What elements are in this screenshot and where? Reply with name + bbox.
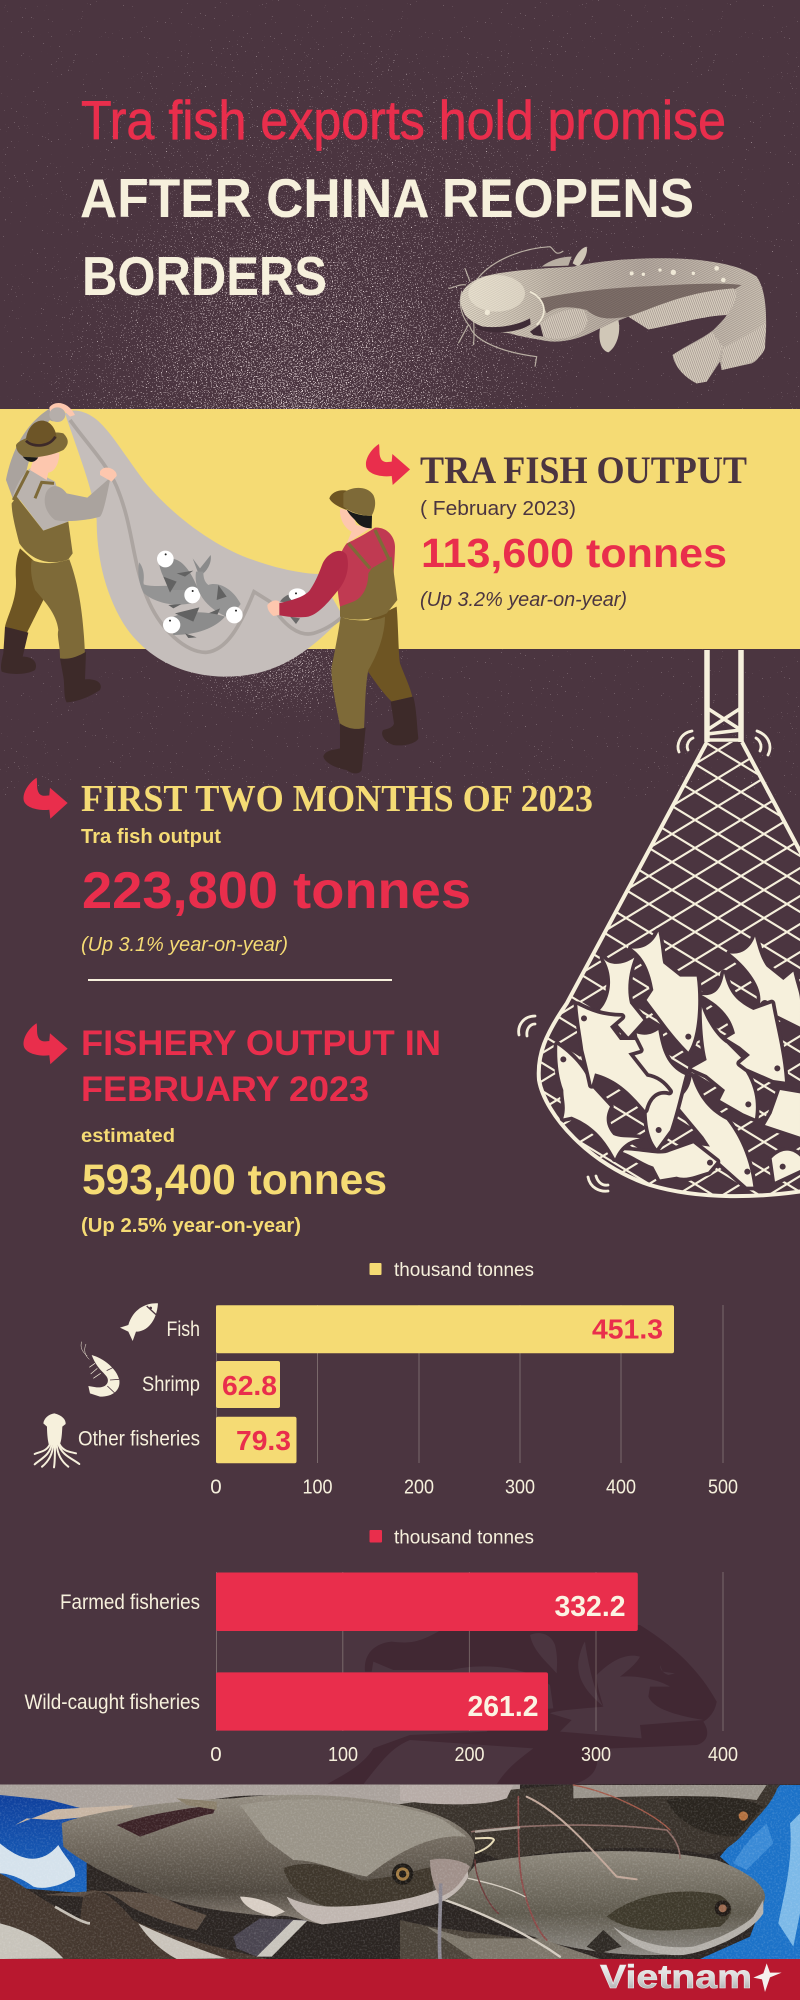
- footer bar: [0, 1959, 800, 2000]
- icon: shrimp: [81, 1342, 119, 1397]
- legend: thousand tonnes: [394, 1260, 534, 1281]
- icon: engraved catfish: [448, 247, 766, 383]
- bar chart: farmed vs wild-caught: [24, 1527, 738, 1766]
- legend: thousand tonnes: [394, 1527, 534, 1548]
- logo: Vietnam+: Vietnam: [600, 1958, 752, 1995]
- sleeve and hand: [45, 478, 110, 521]
- fish in the net: [138, 551, 306, 638]
- gridlines: [216, 1305, 723, 1463]
- barbels: [445, 1785, 680, 1957]
- neck and head: [30, 453, 59, 480]
- watermark catfish: [327, 1625, 717, 1784]
- title: [80, 89, 726, 307]
- title line: BORDERS: BORDERS: [82, 245, 327, 307]
- hat: [16, 432, 68, 457]
- right fisherman: [267, 488, 418, 773]
- icon: fish: [120, 1303, 158, 1341]
- axis labels: 0: [210, 1743, 222, 1766]
- barbel: [439, 1883, 441, 1959]
- photo grain: [0, 1784, 800, 1960]
- icon: red arrow: [24, 1023, 68, 1064]
- change: (Up 2.5% year-on-year): [81, 1214, 301, 1237]
- front leg and boot: [31, 559, 85, 659]
- torso: [13, 468, 68, 531]
- value: 113,600 tonnes: [421, 530, 727, 576]
- axis labels: 0: [210, 1476, 222, 1498]
- overalls: [340, 557, 397, 620]
- lower left fish: [0, 1873, 267, 1959]
- arm and hand: [278, 551, 348, 617]
- value: 593,400 tonnes: [82, 1157, 387, 1204]
- gridlines: [216, 1572, 723, 1731]
- bar: fish: Fish: [166, 1318, 200, 1341]
- front leg and boot: [331, 617, 385, 730]
- title line: AFTER CHINA REOPENS: AFTER CHINA REOPENS: [80, 167, 694, 229]
- bar: wild-caught fisheries: [24, 1672, 548, 1731]
- change: (Up 3.1% year-on-year): [81, 934, 288, 956]
- value: 223,800 tonnes: [82, 862, 471, 920]
- heading: FIRST TWO MONTHS OF 2023: [81, 778, 593, 820]
- axis labels: 500: [708, 1476, 738, 1498]
- bar: wild-caught fisheries: 261.2: [468, 1691, 538, 1723]
- subheading: estimated: [81, 1125, 175, 1147]
- panel: tra fish output: [366, 444, 747, 611]
- axis labels: [210, 1743, 738, 1766]
- net handle: [707, 650, 741, 742]
- bar chart: catch by species: [78, 1260, 738, 1498]
- heading line two: FEBRUARY 2023: [81, 1070, 369, 1109]
- upper right dark fish: [380, 1785, 778, 1860]
- bar: other fisheries: Other fisheries: [78, 1428, 200, 1450]
- icon: red arrow: [366, 444, 410, 485]
- icon: fishing net with fish: [519, 650, 800, 1200]
- axis labels: 100: [302, 1476, 332, 1498]
- speckle texture: [10, 10, 670, 730]
- back leg and boot: [365, 607, 412, 702]
- axis labels: 400: [606, 1476, 636, 1498]
- axis labels: 300: [505, 1476, 535, 1498]
- bar: farmed fisheries: [60, 1572, 638, 1631]
- left fisherman: [6, 403, 117, 702]
- bar: shrimp: [142, 1361, 280, 1408]
- panel: fishery output: [24, 1023, 441, 1237]
- bar: shrimp: 62.8: [222, 1370, 277, 1401]
- panel: first two months: [24, 778, 593, 956]
- date: ( February 2023): [420, 498, 576, 520]
- eye: [392, 1863, 413, 1885]
- pectoral fin: [233, 1918, 307, 1957]
- bar: fish: [166, 1305, 674, 1353]
- yellow band panel: [0, 409, 800, 649]
- icon: squid: [35, 1413, 79, 1467]
- axis labels: 100: [328, 1743, 358, 1766]
- left fisherman back leg and boot: [1, 548, 43, 674]
- net mesh: [530, 740, 800, 1200]
- axis labels: 300: [581, 1743, 611, 1766]
- heading line one: FISHERY OUTPUT IN: [81, 1024, 441, 1063]
- dorsal fin: [117, 1805, 217, 1837]
- top fish strip: [0, 1784, 520, 1808]
- axis labels: 400: [708, 1743, 738, 1766]
- bar: shrimp: Shrimp: [142, 1373, 200, 1396]
- right blue tarp: [700, 1785, 800, 1959]
- net: [65, 411, 343, 677]
- heading: TRA FISH OUTPUT: [420, 449, 747, 492]
- raised sleeve and hand: [6, 408, 63, 500]
- cap: [329, 490, 347, 510]
- net outline: [539, 742, 800, 1196]
- bar: other fisheries: [78, 1417, 296, 1463]
- illustration: fishermen holding a net: [1, 403, 418, 773]
- bar: fish: 451.3: [592, 1314, 663, 1344]
- bar: other fisheries: 79.3: [236, 1425, 291, 1456]
- lower right fish: [447, 1851, 765, 1955]
- axis labels: 200: [454, 1743, 484, 1766]
- shirt: [337, 528, 395, 607]
- photo: catfish on blue tarp: [0, 1784, 800, 1960]
- subheading: Tra fish output: [81, 825, 221, 848]
- title line: Tra fish exports hold promise: Tra fish exports hold promise: [81, 89, 726, 151]
- motion marks: [519, 731, 770, 1191]
- bar: wild-caught fisheries: Wild-caught fisheries: [24, 1691, 200, 1714]
- bar: farmed fisheries: 332.2: [554, 1591, 626, 1623]
- net fish: [557, 932, 800, 1187]
- axis labels: [210, 1476, 738, 1498]
- neck and head: [347, 525, 370, 543]
- change: (Up 3.2% year-on-year): [420, 589, 627, 611]
- bar: farmed fisheries: Farmed fisheries: [60, 1591, 200, 1614]
- left blue tarp: [0, 1793, 87, 1893]
- axis labels: 200: [404, 1476, 434, 1498]
- icon: red arrow: [24, 778, 68, 819]
- main catfish: [62, 1795, 475, 1924]
